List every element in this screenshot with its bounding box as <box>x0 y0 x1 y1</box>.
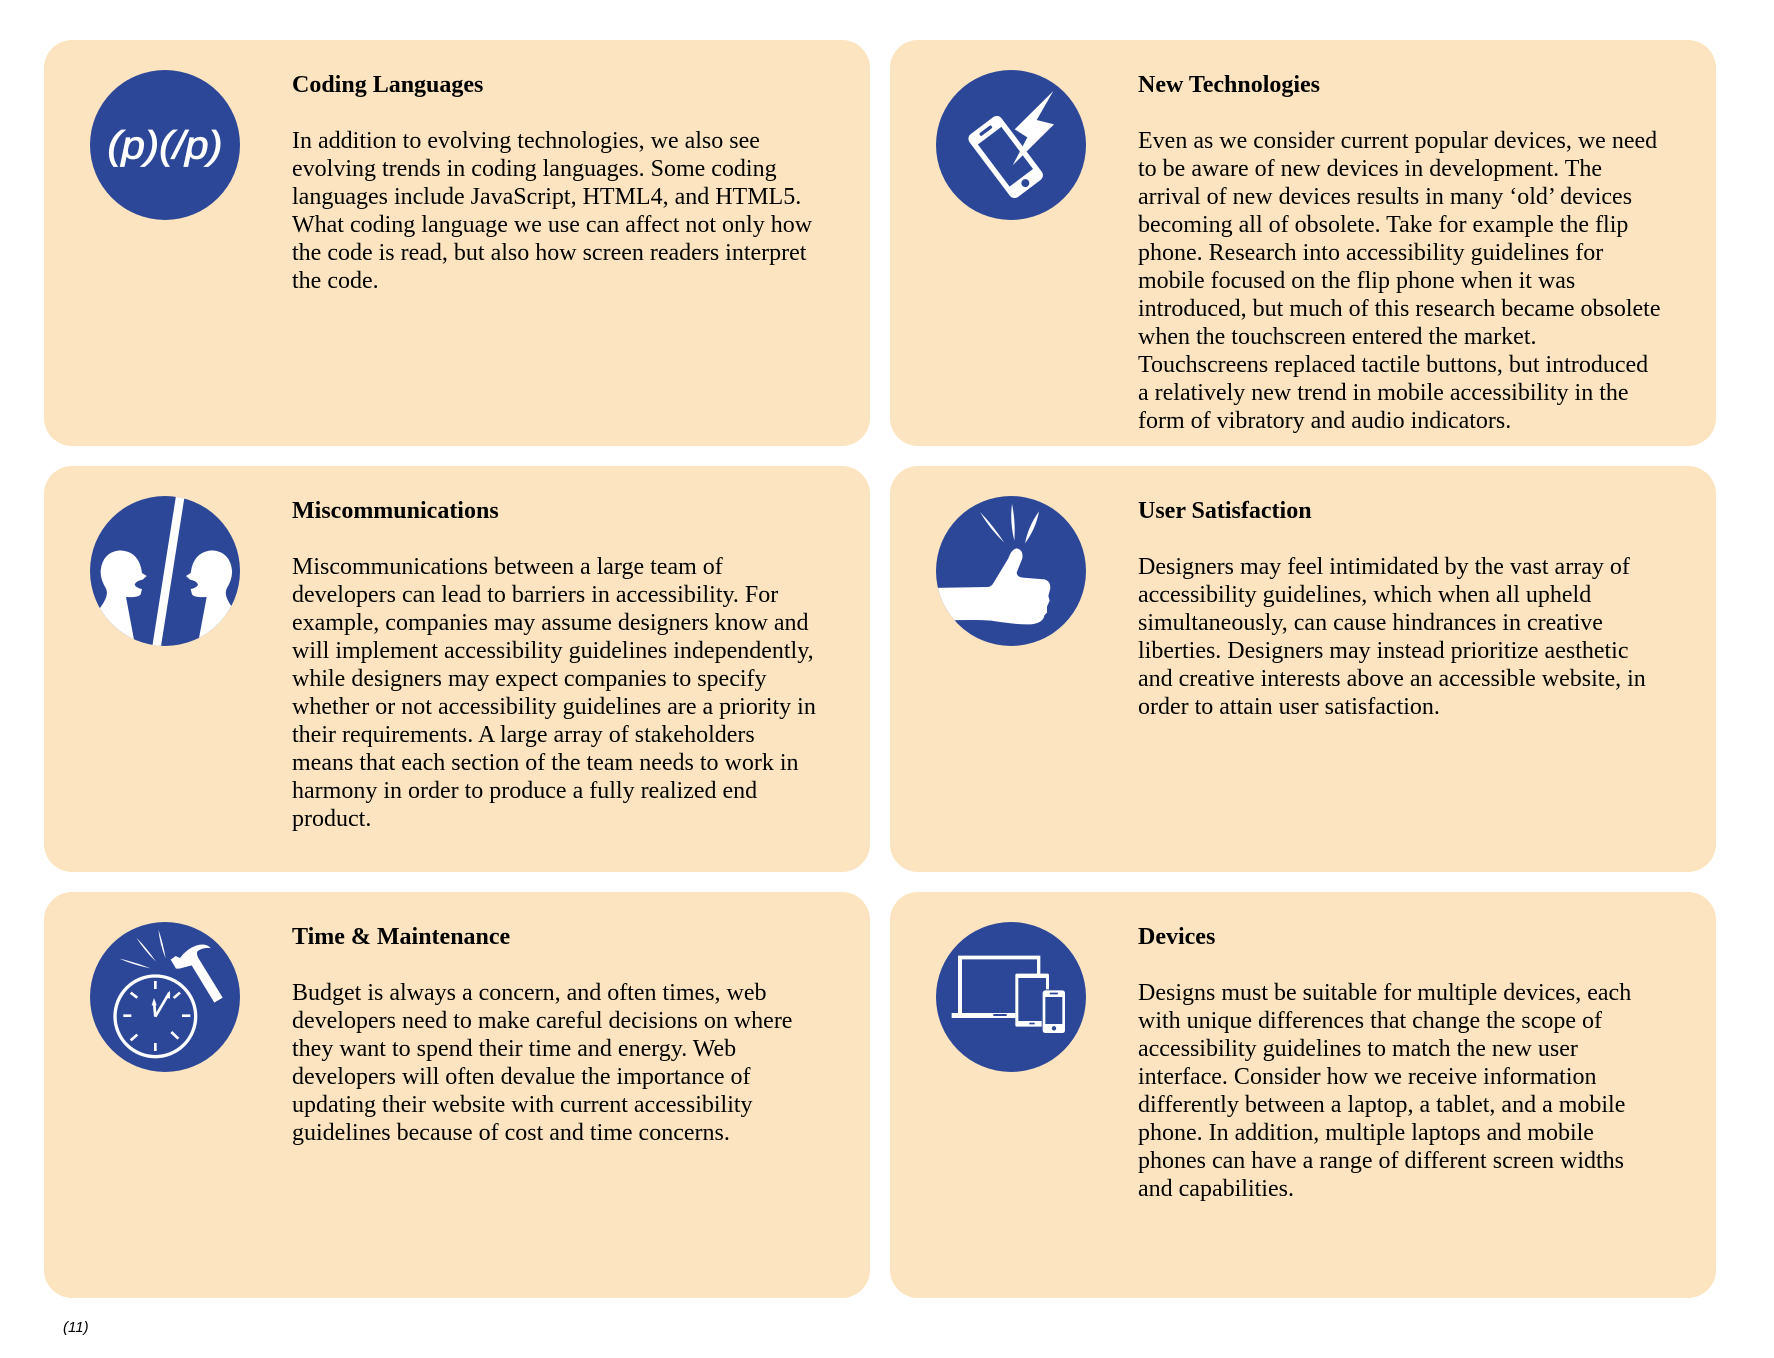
text block: and creative interests above an accessible website, in <box>1138 666 1646 692</box>
text block: What coding language we use can affect not only how <box>292 212 812 238</box>
text block: they want to spend their time and energy. Web <box>292 1036 736 1062</box>
text block: Designs must be suitable for multiple devices, each <box>1138 980 1631 1006</box>
text block: becoming all of obsolete. Take for example the flip <box>1138 212 1628 238</box>
text block: simultaneously, can cause hindrances in creative <box>1138 610 1603 636</box>
text block: Even as we consider current popular devices, we need <box>1138 128 1657 154</box>
text block <box>292 980 792 1146</box>
panel: Devices <box>890 892 1716 1298</box>
text block: the code is read, but also how screen readers interpret <box>292 240 806 266</box>
text block: order to attain user satisfaction. <box>1138 694 1440 720</box>
text block: accessibility guidelines, which when all upheld <box>1138 582 1591 608</box>
text block: with unique differences that change the scope of <box>1138 1008 1602 1034</box>
text block: developers can lead to barriers in accessibility. For <box>292 582 778 608</box>
icon: paragraph tags: (p)(/p) <box>107 124 223 168</box>
text block: developers need to make careful decisions on where <box>292 1008 792 1034</box>
text block <box>292 554 816 832</box>
text block: example, companies may assume designers know and <box>292 610 809 636</box>
icon: two arguing heads <box>90 496 240 646</box>
text block: whether or not accessibility guidelines are a priority in <box>292 694 816 720</box>
text block: a relatively new trend in mobile accessibility in the <box>1138 380 1629 406</box>
text block <box>1138 128 1660 434</box>
text block: developers will often devalue the importance of <box>292 1064 750 1090</box>
text block: phones can have a range of different screen widths <box>1138 1148 1624 1174</box>
text block: will implement accessibility guidelines independently, <box>292 638 814 664</box>
panel: New Technologies <box>890 40 1716 446</box>
text block: harmony in order to produce a fully realized end <box>292 778 757 804</box>
text block: updating their website with current accessibility <box>292 1092 753 1118</box>
text block: differently between a laptop, a tablet, and a mobile <box>1138 1092 1625 1118</box>
text block: their requirements. A large array of stakeholders <box>292 722 755 748</box>
icon: phone with lightning <box>936 70 1086 220</box>
icon: thumbs up <box>936 496 1086 646</box>
text block: liberties. Designers may instead prioritize aesthetic <box>1138 638 1628 664</box>
text block: phone. Research into accessibility guidelines for <box>1138 240 1603 266</box>
text block: evolving trends in coding languages. Some coding <box>292 156 777 182</box>
text block: phone. In addition, multiple laptops and mobile <box>1138 1120 1594 1146</box>
heading: Miscommunications <box>292 498 499 524</box>
text block: product. <box>292 806 371 832</box>
text block: and capabilities. <box>1138 1176 1294 1202</box>
text block: arrival of new devices results in many ‘old’ devices <box>1138 184 1632 210</box>
heading: Time & Maintenance <box>292 924 510 950</box>
text block: languages include JavaScript, HTML4, and HTML5. <box>292 184 801 210</box>
text block: the code. <box>292 268 379 294</box>
text block: In addition to evolving technologies, we also see <box>292 128 760 154</box>
heading: User Satisfaction <box>1138 498 1312 524</box>
text block: accessibility guidelines to match the new user <box>1138 1036 1578 1062</box>
panel: User Satisfaction <box>890 466 1716 872</box>
text block: form of vibratory and audio indicators. <box>1138 408 1511 434</box>
text block: guidelines because of cost and time concerns. <box>292 1120 730 1146</box>
heading: Coding Languages <box>292 72 483 98</box>
panel: Coding Languages <box>44 40 870 446</box>
icon: clock and hammer <box>90 922 240 1072</box>
panel: Miscommunications <box>44 466 870 872</box>
icon: paragraph tags <box>90 70 240 220</box>
text block: introduced, but much of this research became obsolete <box>1138 296 1660 322</box>
text block: when the touchscreen entered the market. <box>1138 324 1536 350</box>
text block: Touchscreens replaced tactile buttons, but introduced <box>1138 352 1648 378</box>
text block: means that each section of the team needs to work in <box>292 750 798 776</box>
text block: Budget is always a concern, and often times, web <box>292 980 767 1006</box>
panel: Time & Maintenance <box>44 892 870 1298</box>
text block: to be aware of new devices in development. The <box>1138 156 1602 182</box>
text block <box>292 128 812 294</box>
text block <box>1138 980 1631 1202</box>
text block: interface. Consider how we receive information <box>1138 1064 1596 1090</box>
heading: Devices <box>1138 924 1215 950</box>
icon: laptop tablet phone <box>936 922 1086 1072</box>
text block: Designers may feel intimidated by the vast array of <box>1138 554 1630 580</box>
text block: Miscommunications between a large team of <box>292 554 723 580</box>
text block <box>1138 554 1646 720</box>
footnote: (11) <box>63 1319 89 1336</box>
text block: while designers may expect companies to specify <box>292 666 767 692</box>
text block: mobile focused on the flip phone when it was <box>1138 268 1575 294</box>
heading: New Technologies <box>1138 72 1320 98</box>
